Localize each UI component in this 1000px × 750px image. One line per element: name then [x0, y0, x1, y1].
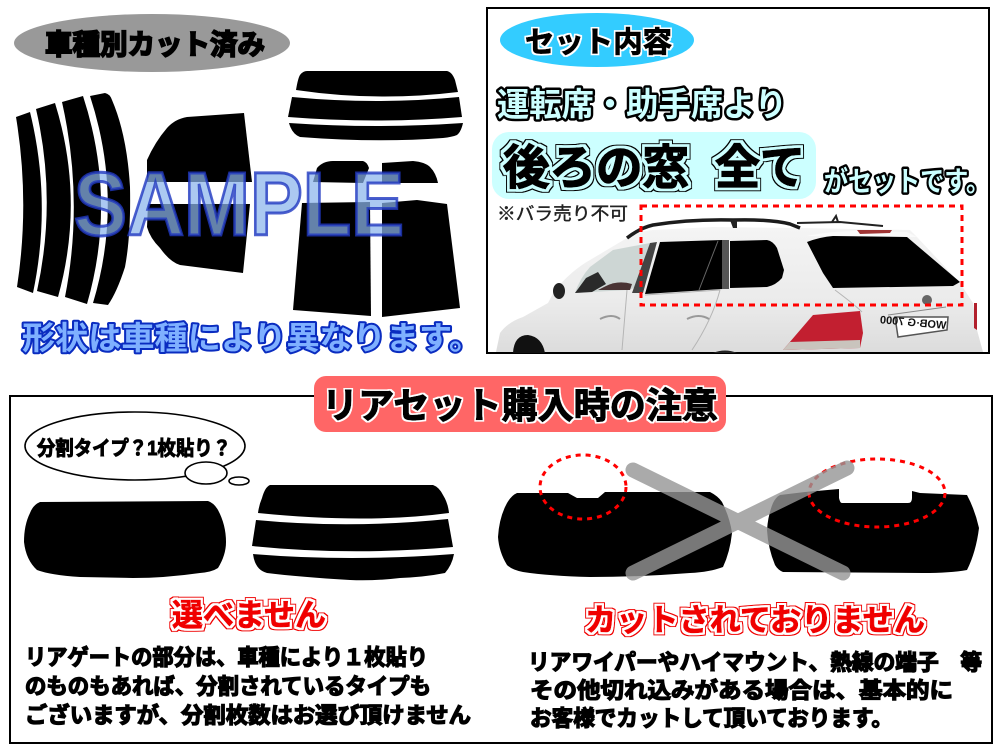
- label: cannot choose: 選べません: [172, 598, 326, 633]
- label: not cut: カットされておりません: [585, 603, 925, 638]
- heading badge: set contents: [500, 13, 694, 67]
- thought bubble: split or single: [25, 412, 249, 485]
- highlight: all rear windows: [492, 132, 816, 199]
- highlight: all rear windows: 後ろの窓: [503, 141, 689, 194]
- film pieces: quarter windows: [293, 161, 460, 317]
- caption: shape varies by model: 形状は車種により異なります。: [22, 320, 482, 356]
- text: split type explanation: [25, 645, 471, 728]
- heading badge: set contents: セット内容: [525, 26, 672, 59]
- SAMPLE watermark: SAMPLE: [74, 155, 404, 255]
- text: split type explanation: のものもあれば、分割されているタイプも: [25, 674, 431, 699]
- note: not sold separately: ※バラ売り不可: [497, 204, 628, 224]
- heading badge: pre-cut by model: 車種別カット済み: [45, 29, 265, 60]
- film: one-piece rear window: [24, 501, 226, 578]
- film: three-piece rear window: [252, 485, 454, 580]
- gray cross mark: [633, 468, 847, 573]
- text: cutout explanation: [528, 650, 982, 731]
- highlight: all rear windows: 全て: [715, 141, 805, 194]
- thought bubble: split or single: 分割タイプ？1枚貼り？: [37, 437, 231, 460]
- film pieces: side curved strips: [16, 93, 130, 305]
- film pieces: side window: [147, 113, 252, 273]
- panel: set contents: [487, 8, 990, 353]
- text: from driver and passenger seats: 運転席・助手席より: [497, 86, 787, 123]
- heading badge: pre-cut by model: [14, 14, 290, 72]
- text: cutout explanation: その他切れ込みがある場合は、基本的に: [530, 678, 953, 703]
- text: cutout explanation: リアワイパーやハイマウント、熱線の端子 等: [528, 650, 982, 675]
- text: cutout explanation: お客様でカットして頂いております。: [530, 706, 893, 731]
- red dashed box: rear windows: [641, 206, 962, 305]
- red dashed circle: wiper notch: [540, 455, 626, 519]
- red dashed circle: high-mount notch: [809, 459, 945, 527]
- film pieces: rear window three strips: [288, 71, 463, 140]
- panel: rear set caution: [10, 376, 992, 743]
- illustration: white wagon car: WOB·G 7000: [879, 314, 947, 332]
- text: split type explanation: ございますが、分割枚数はお選び頂けません: [25, 703, 471, 728]
- text: split type explanation: リアゲートの部分は、車種により１枚貼り: [25, 645, 428, 670]
- illustration: white wagon car: [496, 216, 983, 353]
- film: rear window with high-mount cutout: [767, 489, 979, 573]
- film: rear window with wiper cutout: [498, 492, 732, 577]
- heading: rear set purchase caution: リアセット購入時の注意: [322, 385, 718, 426]
- panel: pre-cut film sample: [14, 14, 482, 356]
